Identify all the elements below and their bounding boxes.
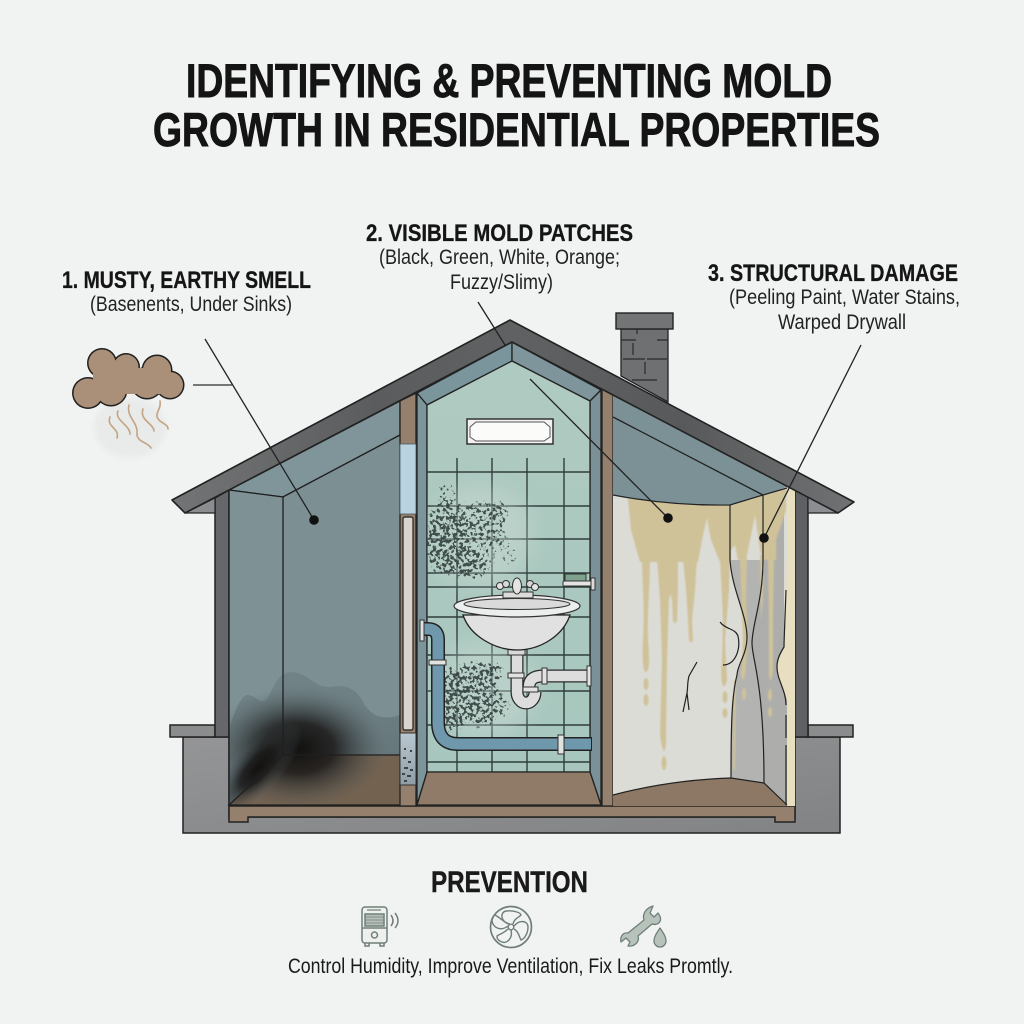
panel: left basement room	[228, 402, 400, 806]
drain pipe	[508, 652, 591, 703]
label 3: structural damage: Warped Drywall	[778, 311, 906, 334]
floor	[613, 778, 787, 806]
stud between bathroom and right room	[602, 389, 613, 806]
panel: partition wall and window	[400, 393, 416, 806]
left soffit	[185, 498, 215, 513]
leader 1 with dot	[205, 339, 319, 525]
black mold stain	[230, 672, 400, 804]
label 3: structural damage: 3. STRUCTURAL DAMAGE	[708, 260, 958, 287]
house cross-section	[170, 320, 854, 833]
label 1: musty smell: (Basenents, Under Sinks)	[90, 293, 292, 316]
wall outlines	[613, 488, 787, 805]
cracks	[683, 622, 739, 712]
label 3: structural damage	[708, 260, 960, 334]
floor	[229, 755, 400, 805]
vent	[467, 419, 553, 444]
right ledge	[808, 725, 853, 737]
roof	[172, 320, 854, 513]
cloud connector line	[193, 384, 232, 386]
left exterior wall	[215, 490, 229, 737]
prevention heading: PREVENTION	[431, 866, 588, 899]
icon: ventilation fan	[490, 906, 532, 948]
tile grid	[427, 458, 590, 772]
floor	[417, 772, 601, 805]
label 2: visible mold patches	[366, 220, 633, 294]
chimney	[616, 313, 673, 402]
icon: musty odor cloud	[72, 348, 184, 458]
panel: bathroom	[417, 342, 601, 805]
leader 2 upper segment	[478, 302, 505, 345]
label 2: visible mold patches: 2. VISIBLE MOLD PATCHES	[366, 220, 633, 247]
water stains	[627, 488, 786, 770]
leader 3 with dot	[759, 345, 861, 543]
left ledge	[170, 725, 215, 737]
right exterior wall	[795, 490, 808, 737]
blue supply pipe	[420, 620, 592, 754]
icon: dehumidifier	[362, 907, 398, 946]
label 1: musty smell: 1. MUSTY, EARTHY SMELL	[62, 267, 311, 294]
faucet	[496, 578, 538, 598]
side panel	[730, 560, 764, 783]
panel: right damaged room	[613, 395, 795, 806]
icon: wrench and drop	[621, 906, 666, 947]
label 3: structural damage: (Peeling Paint, Water Stains,	[729, 286, 960, 309]
title: IDENTIFYING & PREVENTING MOLD	[186, 54, 832, 107]
right soffit	[808, 497, 838, 513]
title	[153, 54, 880, 156]
label 2: visible mold patches: (Black, Green, White, Orange;	[379, 246, 620, 269]
soap dish	[563, 574, 595, 590]
label 1: musty smell	[62, 267, 311, 316]
mold patches	[420, 479, 535, 738]
leader 2 lower segment with dot	[530, 379, 673, 523]
cream strip	[787, 487, 795, 806]
floor slab	[229, 806, 795, 822]
prevention text: Control Humidity, Improve Ventilation, Fix Leaks Promtly.	[288, 955, 733, 978]
label 2: visible mold patches: Fuzzy/Slimy)	[450, 271, 553, 294]
sink	[454, 595, 580, 655]
foundation	[183, 737, 840, 833]
